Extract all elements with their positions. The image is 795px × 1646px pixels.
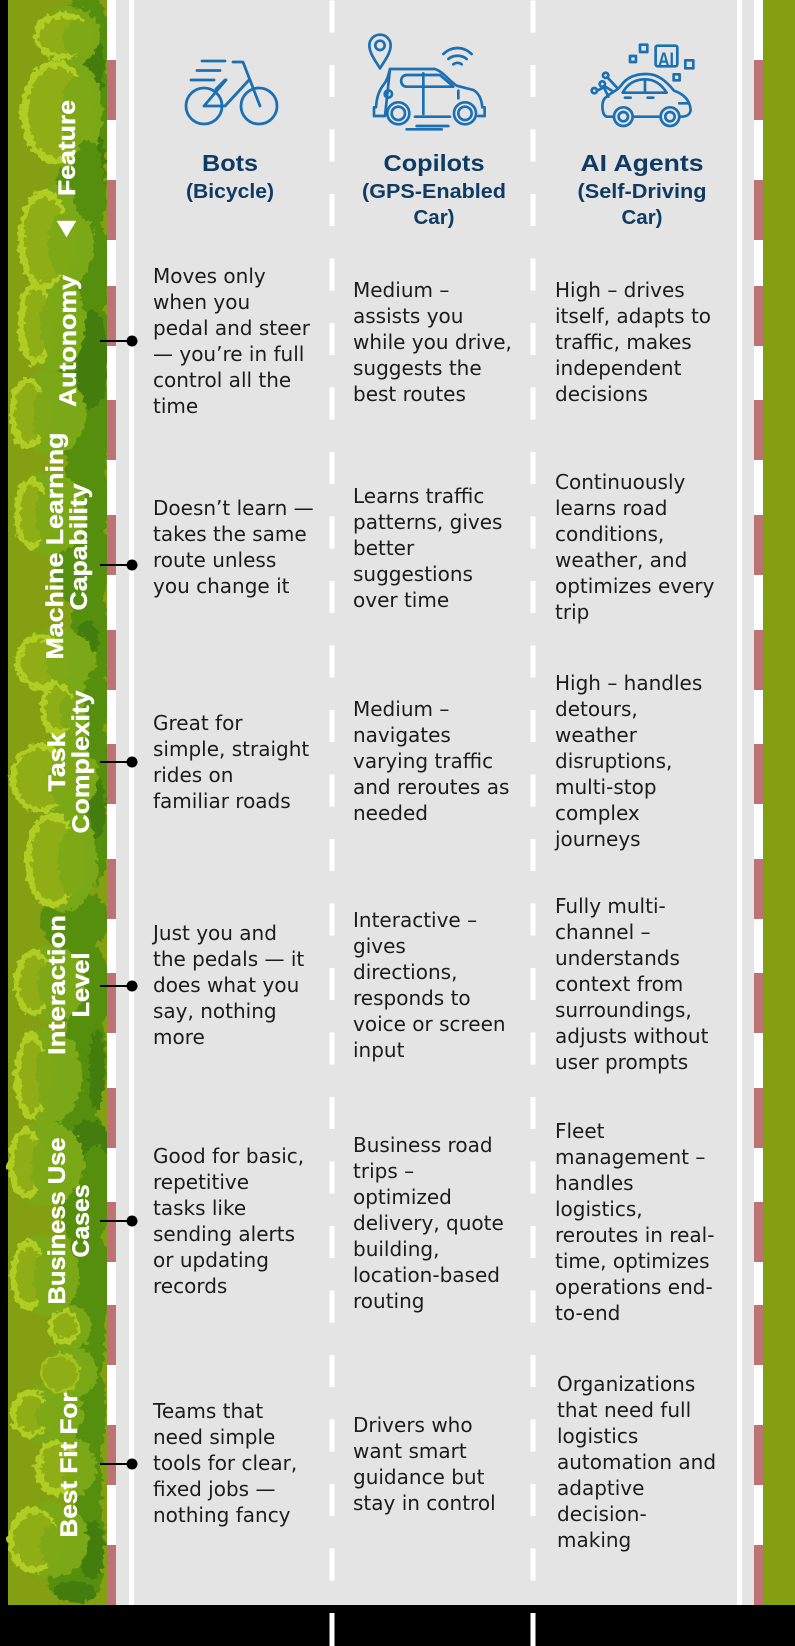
text: copilots learning: suggestions bbox=[353, 562, 473, 586]
label: Machine Learning Capability: Machine Learning bbox=[42, 432, 69, 660]
heading: Copilots: (GPS-Enabled bbox=[362, 181, 506, 203]
text: agents use cases: management – bbox=[555, 1145, 705, 1169]
text: agents learning bbox=[555, 470, 714, 624]
text: agents autonomy bbox=[555, 278, 711, 406]
text: agents best fit: automation and bbox=[557, 1450, 716, 1474]
label: Interaction Level: Interaction bbox=[44, 915, 71, 1055]
text: copilots autonomy bbox=[353, 278, 512, 406]
text: agents learning: Continuously bbox=[555, 470, 685, 494]
label: Autonomy: Autonomy bbox=[55, 274, 82, 407]
text: agents use cases: handles bbox=[555, 1171, 634, 1195]
text: agents interaction: understands bbox=[555, 946, 680, 970]
text: agents best fit: adaptive bbox=[557, 1476, 644, 1500]
text: agents complexity: weather bbox=[555, 723, 637, 747]
label: Machine Learning Capability: Capability bbox=[66, 483, 93, 610]
text: copilots complexity: navigates bbox=[353, 723, 451, 747]
text: copilots interaction: voice or screen bbox=[353, 1012, 506, 1036]
text: agents use cases: reroutes in real- bbox=[555, 1223, 714, 1247]
right curb bbox=[754, 0, 763, 1605]
text: copilots autonomy: suggests the bbox=[353, 356, 482, 380]
text: agents interaction: context from bbox=[555, 972, 683, 996]
text: copilots learning bbox=[353, 484, 502, 612]
text: bots complexity bbox=[153, 711, 309, 813]
text: bots use cases: repetitive bbox=[153, 1170, 249, 1194]
text: bots learning: Doesn’t learn — bbox=[153, 496, 314, 520]
text: bots autonomy: time bbox=[153, 394, 198, 418]
text: copilots autonomy: Medium – bbox=[353, 278, 449, 302]
text: copilots interaction: responds to bbox=[353, 986, 471, 1010]
text: bots autonomy: Moves only bbox=[153, 264, 266, 288]
text: copilots best fit: want smart bbox=[353, 1439, 467, 1463]
label: Business Use Cases: Business Use bbox=[44, 1138, 71, 1304]
heading: Bots: Bots bbox=[202, 150, 258, 176]
text: bots complexity: Great for bbox=[153, 711, 243, 735]
text: agents interaction: adjusts without bbox=[555, 1024, 708, 1048]
heading: AI Agents: Car) bbox=[622, 207, 662, 229]
text: bots use cases: or updating bbox=[153, 1248, 269, 1272]
text: agents best fit: Organizations bbox=[557, 1372, 695, 1396]
text: copilots best fit bbox=[353, 1413, 496, 1515]
text: agents learning: learns road bbox=[555, 496, 667, 520]
text: agents use cases: to-end bbox=[555, 1301, 620, 1325]
text: copilots complexity: Medium – bbox=[353, 697, 449, 721]
text: copilots interaction: input bbox=[353, 1038, 404, 1062]
text: copilots best fit: stay in control bbox=[353, 1491, 496, 1515]
text: bots interaction: say, nothing bbox=[153, 999, 277, 1023]
text: bots autonomy: control all the bbox=[153, 368, 291, 392]
text: copilots use cases: Business road bbox=[353, 1133, 493, 1157]
text: agents autonomy: decisions bbox=[555, 382, 648, 406]
text: bots use cases: Good for basic, bbox=[153, 1144, 304, 1168]
tree line bbox=[7, 0, 112, 1603]
text: copilots use cases: building, bbox=[353, 1237, 439, 1261]
text: copilots use cases: optimized bbox=[353, 1185, 452, 1209]
text: agents learning: trip bbox=[555, 600, 589, 624]
text: copilots interaction bbox=[353, 908, 506, 1062]
label: Interaction Level bbox=[44, 915, 95, 1055]
text: bots complexity: familiar roads bbox=[153, 789, 291, 813]
heading: Copilots: Car) bbox=[414, 207, 454, 229]
text: agents best fit: making bbox=[557, 1528, 631, 1552]
label: Business Use Cases: Cases bbox=[68, 1185, 95, 1257]
icon: bicycle bbox=[186, 61, 277, 124]
text: copilots learning: over time bbox=[353, 588, 449, 612]
icon: AI car bbox=[592, 45, 693, 126]
text: copilots use cases bbox=[353, 1133, 504, 1313]
text: agents learning: weather, and bbox=[555, 548, 687, 572]
text: agents best fit bbox=[557, 1372, 716, 1552]
text: agents complexity bbox=[554, 671, 702, 851]
text: agents autonomy: traffic, makes bbox=[555, 330, 692, 354]
label: Best Fit For: Best Fit For bbox=[56, 1392, 83, 1538]
label: Machine Learning Capability bbox=[42, 432, 93, 660]
text: bots interaction: more bbox=[153, 1025, 205, 1049]
text: copilots complexity bbox=[353, 697, 509, 825]
text: bots best fit bbox=[152, 1399, 297, 1527]
text: bots best fit: nothing fancy bbox=[153, 1503, 291, 1527]
text: agents use cases: time, optimizes bbox=[555, 1249, 710, 1273]
text: agents interaction bbox=[555, 894, 708, 1074]
heading: AI Agents: (Self-Driving bbox=[578, 181, 706, 203]
text: bots best fit: fixed jobs — bbox=[153, 1477, 275, 1501]
row labels bbox=[42, 100, 95, 1538]
text: copilots best fit: guidance but bbox=[353, 1465, 484, 1489]
text: bots learning: route unless bbox=[153, 548, 276, 572]
text: agents interaction: Fully multi- bbox=[555, 894, 666, 918]
left grass bbox=[8, 0, 107, 1605]
label: Feature: Feature bbox=[54, 100, 81, 196]
label: Interaction Level: Level bbox=[68, 952, 95, 1018]
text: copilots learning: better bbox=[353, 536, 414, 560]
text: agents interaction: channel – bbox=[555, 920, 650, 944]
row connectors bbox=[100, 336, 138, 1470]
text: agents use cases: logistics, bbox=[555, 1197, 643, 1221]
label: Task Complexity bbox=[44, 690, 95, 834]
text: copilots complexity: needed bbox=[353, 801, 428, 825]
left curb bbox=[107, 0, 116, 1605]
text: agents complexity: multi-stop bbox=[555, 775, 657, 799]
text: copilots learning: Learns traffic bbox=[353, 484, 484, 508]
left black margin bbox=[0, 0, 6, 1646]
tree canopy mid tones bbox=[8, 6, 103, 1578]
text: bots use cases: sending alerts bbox=[153, 1222, 295, 1246]
arrow: down triangle bbox=[57, 221, 76, 237]
text: bots complexity: simple, straight bbox=[153, 737, 309, 761]
text: bots learning: takes the same bbox=[153, 522, 307, 546]
text: copilots learning: patterns, gives bbox=[353, 510, 502, 534]
text: bots best fit: tools for clear, bbox=[153, 1451, 297, 1475]
text: bots interaction: Just you and bbox=[153, 921, 277, 945]
bottom black band bbox=[0, 1605, 795, 1646]
right grass bbox=[763, 0, 795, 1605]
text: copilots autonomy: while you drive, bbox=[353, 330, 512, 354]
text: copilots complexity: varying traffic bbox=[353, 749, 493, 773]
text: bots best fit: Teams that bbox=[153, 1399, 263, 1423]
text: bots interaction bbox=[152, 921, 304, 1049]
text: bots learning bbox=[153, 496, 314, 598]
text: agents interaction: surroundings, bbox=[555, 998, 692, 1022]
heading: Bots bbox=[186, 150, 274, 203]
text: agents complexity: disruptions, bbox=[555, 749, 672, 773]
label: Business Use Cases bbox=[44, 1138, 95, 1304]
text: agents complexity: detours, bbox=[555, 697, 638, 721]
heading: AI Agents bbox=[578, 150, 706, 229]
text: copilots use cases: location-based bbox=[353, 1263, 500, 1287]
canopy shadow covering the right side of each tree bbox=[32, 20, 96, 1565]
text: bots complexity: rides on bbox=[153, 763, 233, 787]
text: agents use cases: Fleet bbox=[555, 1119, 605, 1143]
heading: Copilots bbox=[362, 150, 506, 229]
text: agents complexity: High – handles bbox=[555, 671, 702, 695]
heading: Copilots: Copilots bbox=[384, 150, 484, 176]
text: agents learning: conditions, bbox=[555, 522, 664, 546]
text: bots interaction: does what you bbox=[153, 973, 299, 997]
text: agents use cases: operations end- bbox=[555, 1275, 713, 1299]
text: agents interaction: user prompts bbox=[555, 1050, 688, 1074]
text: copilots interaction: directions, bbox=[353, 960, 457, 984]
text: agents complexity: complex bbox=[555, 801, 640, 825]
text: copilots autonomy: best routes bbox=[353, 382, 466, 406]
text: agents autonomy: High – drives bbox=[555, 278, 685, 302]
text: bots learning: you change it bbox=[153, 574, 289, 598]
text: copilots use cases: delivery, quote bbox=[353, 1211, 504, 1235]
text: agents learning: optimizes every bbox=[555, 574, 714, 598]
text: copilots use cases: routing bbox=[353, 1289, 424, 1313]
text: bots use cases: tasks like bbox=[153, 1196, 246, 1220]
label: Task Complexity: Task bbox=[44, 732, 71, 792]
text: copilots autonomy: assists you bbox=[353, 304, 463, 328]
label: Task Complexity: Complexity bbox=[68, 690, 95, 834]
text: copilots use cases: trips – bbox=[353, 1159, 414, 1183]
heading: Bots: (Bicycle) bbox=[186, 181, 274, 203]
text: bots autonomy: pedal and steer bbox=[153, 316, 310, 340]
heading: AI Agents: AI Agents bbox=[580, 150, 704, 176]
text: bots autonomy bbox=[153, 264, 310, 418]
text: bots use cases: records bbox=[153, 1274, 227, 1298]
text: copilots interaction: gives bbox=[353, 934, 406, 958]
text: bots autonomy: when you bbox=[153, 290, 250, 314]
text: bots best fit: need simple bbox=[153, 1425, 275, 1449]
text: bots autonomy: — you’re in full bbox=[153, 342, 304, 366]
text: bots interaction: the pedals — it bbox=[153, 947, 304, 971]
text: agents best fit: decision- bbox=[557, 1502, 647, 1526]
text: bots use cases bbox=[153, 1144, 304, 1298]
text: agents autonomy: itself, adapts to bbox=[555, 304, 711, 328]
column headings bbox=[186, 150, 706, 229]
text: copilots interaction: Interactive – bbox=[353, 908, 477, 932]
icon text: AI: AI bbox=[658, 50, 674, 71]
text: agents use cases bbox=[555, 1119, 714, 1325]
text: agents autonomy: independent bbox=[555, 356, 681, 380]
text: agents best fit: that need full bbox=[557, 1398, 691, 1422]
text: agents best fit: logistics bbox=[557, 1424, 638, 1448]
text: copilots complexity: and reroutes as bbox=[353, 775, 509, 799]
text: copilots best fit: Drivers who bbox=[353, 1413, 473, 1437]
text: agents complexity: journeys bbox=[555, 827, 641, 851]
icon: connected car bbox=[369, 35, 485, 129]
